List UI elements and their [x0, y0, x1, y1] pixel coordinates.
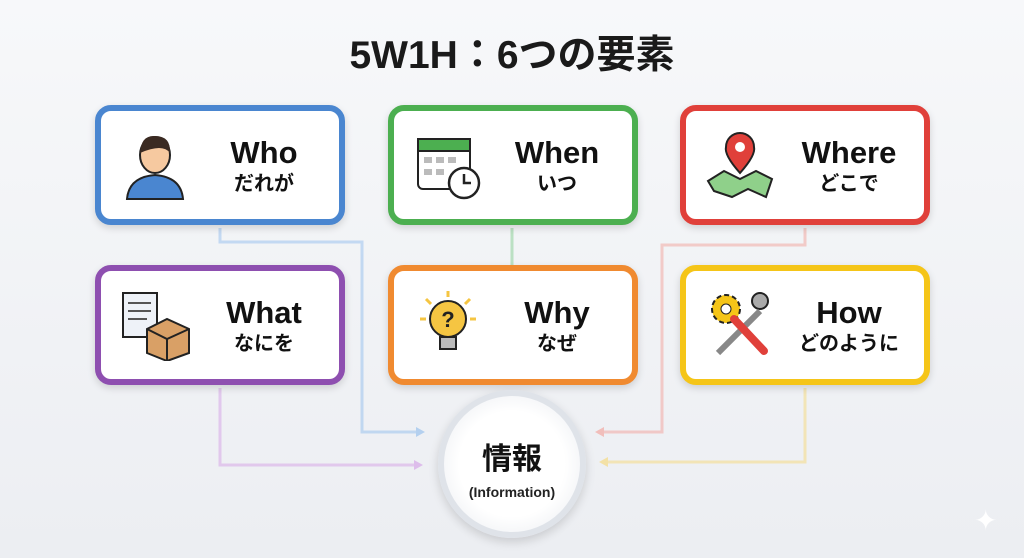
card: How: どのように	[799, 333, 899, 355]
icon: person	[126, 136, 184, 200]
icon: lightbulb	[420, 291, 476, 350]
icon: lightbulb: ?	[441, 307, 455, 332]
card: What: なにを	[234, 333, 294, 355]
icon: calendar clock	[417, 138, 480, 200]
card: When: いつ	[537, 173, 577, 195]
card: Why: Why	[524, 295, 590, 330]
card: Why: なぜ	[537, 333, 577, 355]
icon: tools	[711, 292, 769, 355]
card: How	[680, 265, 930, 385]
center circle: 情報: (Information)	[469, 484, 555, 500]
card: Who	[95, 105, 345, 225]
icon: sparkle: ✦	[974, 505, 997, 536]
center circle: 情報: 情報	[482, 443, 542, 476]
title: 5W1H：6つの要素	[349, 34, 675, 77]
card: Who: Who	[230, 135, 298, 170]
card: Why	[388, 265, 638, 385]
card: Who: だれが	[234, 173, 294, 195]
card: Where: Where	[802, 135, 896, 170]
card: When: When	[515, 135, 599, 170]
card: Where: どこで	[819, 173, 879, 195]
icon: map pin	[706, 132, 774, 198]
card: When	[388, 105, 638, 225]
icon: documents box	[122, 292, 190, 361]
center circle: 情報	[438, 390, 586, 538]
card: What	[95, 265, 345, 385]
card: How: How	[816, 295, 882, 330]
card: Where	[680, 105, 930, 225]
card: What: What	[226, 295, 302, 330]
